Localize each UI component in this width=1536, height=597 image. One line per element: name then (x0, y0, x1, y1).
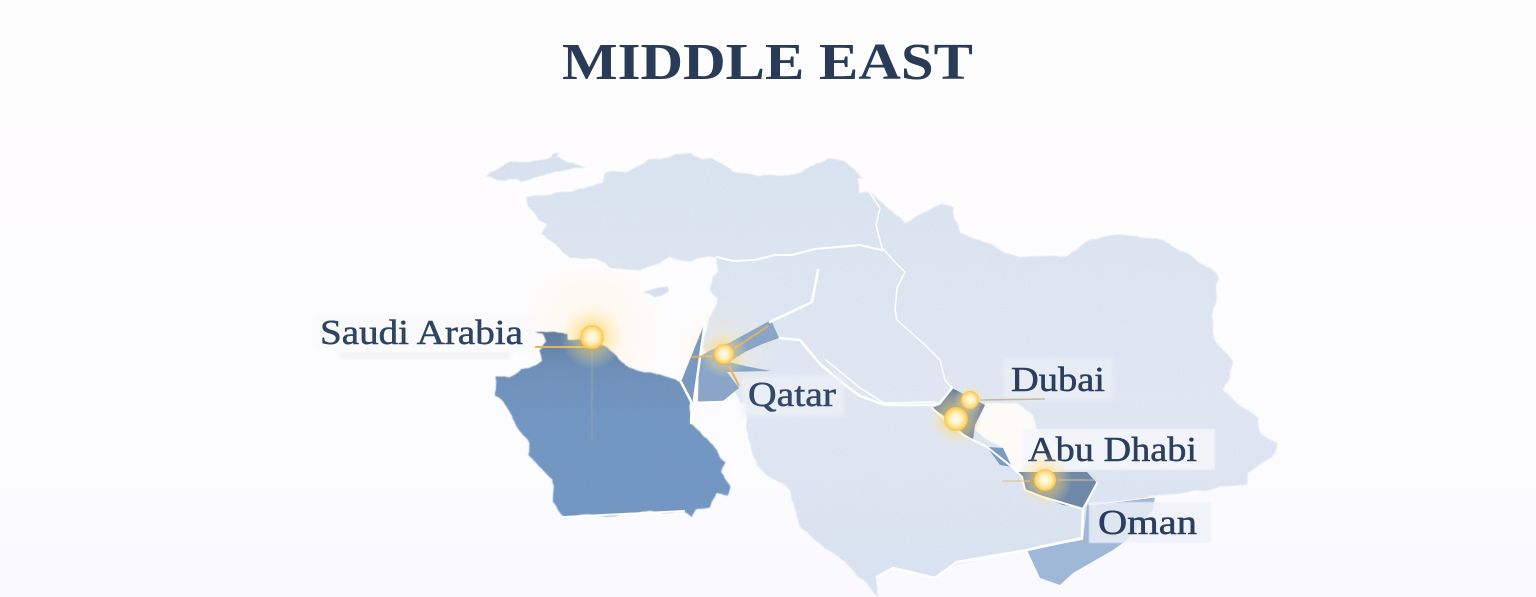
marker: Saudi Arabia (535, 305, 624, 440)
coast strip (987, 447, 1012, 467)
border lines (564, 193, 1155, 578)
marker: Abu Dhabi (1002, 452, 1095, 508)
warm glow: Saudi Arabia (512, 250, 672, 410)
label: Oman (1089, 502, 1211, 543)
label: Saudi Arabia: Saudi Arabia (320, 313, 524, 352)
label: Qatar: Qatar (748, 375, 836, 414)
country: Abu Dhabi region (1017, 472, 1097, 508)
country: Qatar west sliver (681, 322, 705, 403)
marker: Dubai (954, 384, 1045, 416)
warm glow: Qatar (669, 297, 779, 407)
country: Oman (1027, 497, 1155, 585)
label: Oman: Oman (1098, 503, 1197, 542)
title: MIDDLE EAST (562, 34, 973, 91)
label: Abu Dhabi: Abu Dhabi (1028, 430, 1197, 469)
marker: Qatar (692, 326, 768, 386)
region: Persian Gulf water (975, 403, 1060, 472)
label: Dubai: Dubai (1011, 360, 1105, 399)
gulf of Aqaba water (691, 403, 746, 440)
map (485, 153, 1278, 597)
region: light landmass (485, 153, 1278, 597)
country: Qatar east block (698, 320, 779, 402)
marker: Persian Gulf (928, 391, 984, 447)
country: Kuwait strip (932, 388, 985, 440)
country: Saudi Arabia (496, 330, 730, 517)
